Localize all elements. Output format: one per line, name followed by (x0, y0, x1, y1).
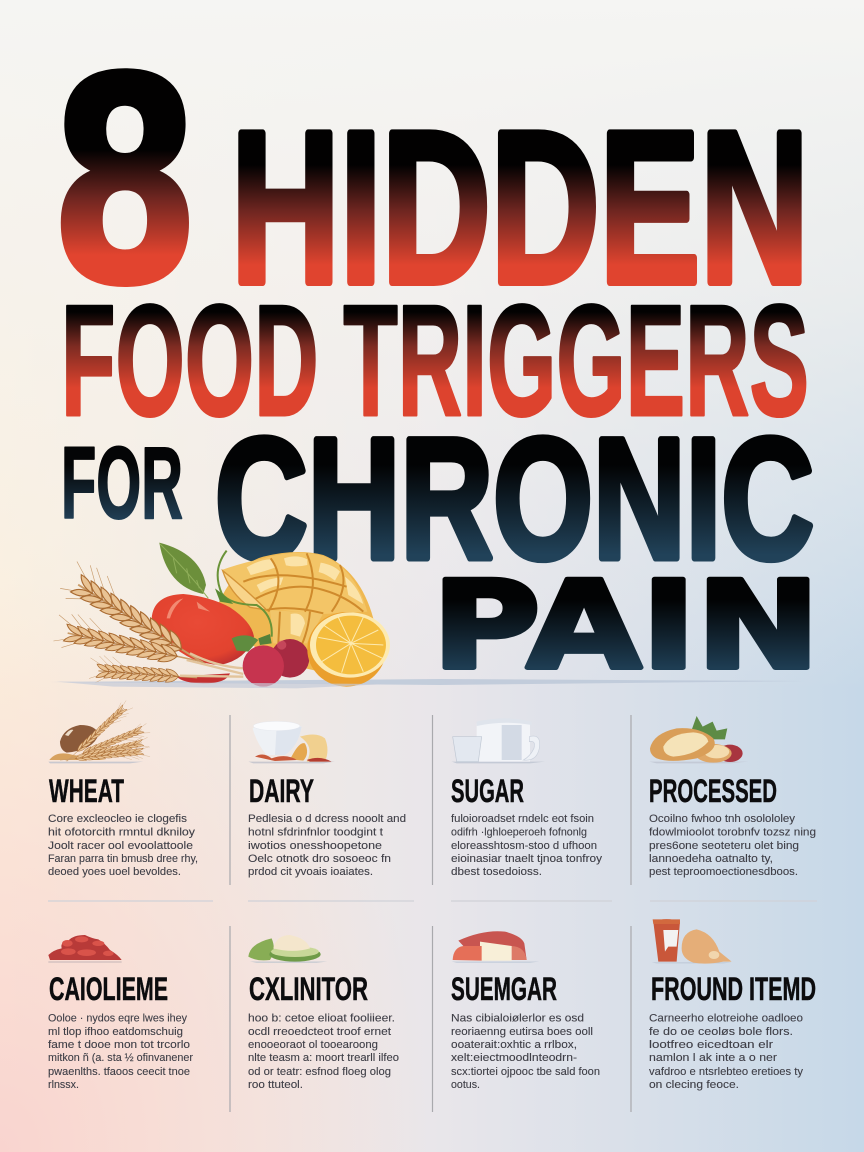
description: deoed yoes uoel bevoldes. (48, 866, 181, 878)
description: Core excleocleo ie clogefis (48, 813, 187, 825)
icon: sauce cup and flatbread (652, 919, 732, 964)
description: Carneerho elotreiohe oadloeo (649, 1012, 803, 1024)
panel: processed (649, 716, 816, 878)
description: lootfreo eicedtoan elr (649, 1039, 773, 1051)
icon: apple leaf (159, 543, 272, 637)
description: nlte teasm a: moort trearll ilfeo (248, 1052, 399, 1064)
description: Oelc otnotk dro sosoeoc fn (248, 853, 391, 865)
icon: orange slice (307, 612, 390, 687)
heading: SUEMGAR (451, 971, 557, 1007)
description: enooeoraot ol tooearoong (248, 1039, 378, 1051)
description: rlnssx. (48, 1079, 79, 1091)
icon: wheat stalks (52, 557, 243, 690)
description (649, 1012, 803, 1091)
description: namlon l ak inte a o ner (649, 1052, 777, 1064)
icon: green vegetable and grains (248, 935, 327, 963)
description: vafdroo e ntsrlebteo eretioes ty (649, 1066, 803, 1078)
description: Joolt racer ool evoolattoole (48, 840, 193, 852)
description: hit ofotorcith rmntul dkniloy (48, 826, 195, 838)
description: dbest tosedoioss. (451, 866, 542, 878)
description: lannoedeha oatnalto ty, (649, 853, 773, 865)
description: eioinasiar tnaelt tjnoa tonfroy (451, 853, 602, 865)
description: scx:tiortei ojpooc tbe sald foon (451, 1066, 600, 1078)
heading: CXLINITOR (249, 971, 368, 1007)
icon: apple (152, 594, 254, 683)
title line: PAIN: PAIN (432, 556, 820, 696)
title (49, 17, 820, 696)
icon: meat and cheese (452, 931, 539, 963)
description (649, 813, 816, 878)
description: reoriaenng eutirsa boes ooll (451, 1026, 593, 1038)
description: pres6one seoteteru olet bing (649, 840, 799, 852)
description: Pedlesia o d dcress nooolt and (248, 813, 406, 825)
heading: WHEAT (49, 773, 124, 809)
description (48, 813, 198, 878)
panel: caioliene (48, 935, 193, 1091)
icon: mango (217, 552, 373, 672)
description: hoo b: cetoe elioat fooliieer. (248, 1012, 395, 1024)
description: xelt:eiectmoodlnteodrn- (451, 1052, 577, 1064)
description: fame t dooe mon tot trcorlo (48, 1039, 190, 1051)
description: prdod cit yvoais ioaiates. (248, 866, 373, 878)
description: Nas cibialoiølerlor es osd (451, 1012, 584, 1024)
description: pest teproomoectionesdboos. (649, 866, 798, 878)
panel: dairy (248, 721, 406, 878)
description: iwotios onesshoopetone (248, 840, 382, 852)
panel: wheat (48, 699, 198, 878)
description: ooaterait:oxhtic a rrlbox, (451, 1039, 577, 1051)
description: hotnl sfdrinfnlor toodgint t (248, 826, 384, 838)
description (48, 1012, 193, 1091)
description: fdowlmioolot torobnfv tozsz ning (649, 826, 816, 838)
panel: grid dividers (48, 715, 817, 1112)
icon: sliced bread and herbs (649, 716, 748, 763)
description: mitkon ñ (a. sta ½ ofinvanener (48, 1052, 193, 1064)
heading: CAIOLIEME (49, 971, 168, 1007)
icon: sugar jar and cup (452, 718, 545, 763)
hero illustration: fruit and wheat (52, 543, 390, 690)
description: pwaenlths. tfaoos ceecit tnoe (48, 1066, 190, 1078)
description: ocdl rreoedcteot troof ernet (248, 1026, 392, 1038)
icon: bread and wheat (48, 699, 151, 768)
panel: found item (649, 919, 816, 1091)
description (451, 1012, 600, 1091)
description: Faran parra tin bmusb dree rhy, (48, 853, 198, 865)
description (248, 813, 406, 878)
description (451, 813, 602, 878)
description: Ooloe · nydos eqre lwes ihey (48, 1012, 187, 1024)
heading: DAIRY (249, 773, 314, 809)
description: fuloioroadset rndelc eot fsoin (451, 813, 594, 825)
description: roo ttuteol. (248, 1079, 303, 1091)
title numeral 8: 8 (49, 17, 201, 348)
description: od or teatr: esfnod floeg olog (248, 1066, 391, 1078)
hero divider shadow (50, 679, 806, 685)
description: ootus. (451, 1079, 480, 1091)
heading: PROCESSED (649, 773, 777, 809)
description: on clecing feoce. (649, 1079, 739, 1091)
panel: suemgar (451, 931, 600, 1091)
description: odifrh ·lghloeperoeh fofnonlg (451, 826, 587, 838)
icon: dairy bowl and cheese (248, 721, 335, 763)
description (248, 1012, 399, 1091)
title line: FOR: FOR (61, 426, 183, 540)
description: fe do oe ceoløs bole flors. (649, 1026, 793, 1038)
icon: red berries pile (48, 935, 122, 962)
panel: cxlinitor (248, 935, 399, 1091)
description: eloreasshtosm-stoo d ufhoon (451, 840, 597, 852)
description: ml tlop ifhoo eatdomschuig (48, 1026, 183, 1038)
icon: cherries (232, 634, 309, 687)
description: Ocoilno fwhoo tnh osolololey (649, 813, 795, 825)
ground shadow (57, 682, 387, 688)
heading: SUGAR (451, 773, 524, 809)
panel: sugar (451, 718, 602, 878)
